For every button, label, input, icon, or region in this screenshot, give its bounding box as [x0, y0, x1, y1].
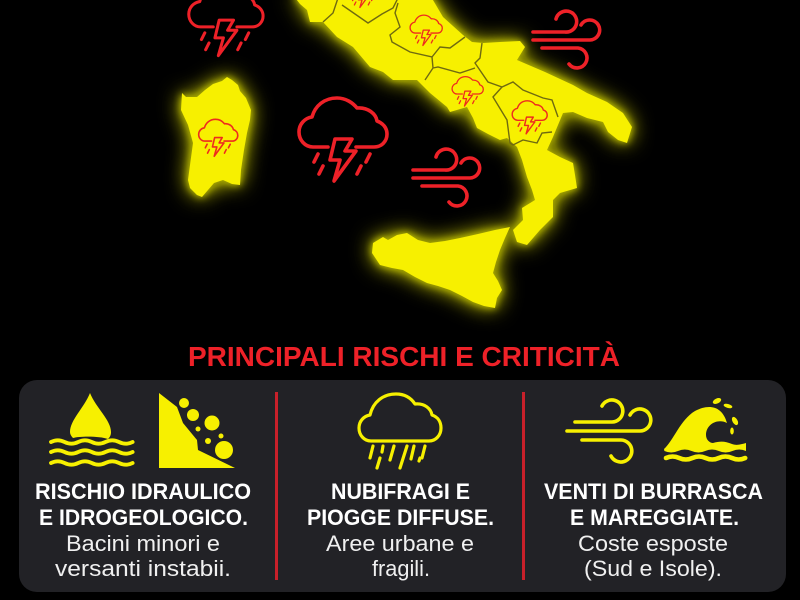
text: cloudbursts: Aree urbane e: [326, 531, 474, 556]
text: gale winds and storm surges: E MAREGGIATE.: [570, 505, 739, 530]
landmass: islands and mainland with glow: [181, 0, 632, 308]
text: hydraulic risk: E IDROGEOLOGICO.: [39, 505, 248, 530]
text: cloudbursts: fragili.: [372, 556, 430, 581]
text: hydraulic risk: versanti instabii.: [55, 556, 231, 581]
icon: storm cloud top of map: [347, 0, 379, 7]
map of southern Italy: [181, 0, 632, 308]
icon: wind Tyrrhenian: [413, 149, 480, 206]
panel: risks: [19, 380, 786, 592]
icon: landslide: [159, 393, 235, 468]
text: hydraulic risk: [35, 479, 251, 581]
heading: PRINCIPALI RISCHI E CRITICITÀ: [188, 341, 620, 372]
text: gale winds and storm surges: VENTI DI BURRASCA: [544, 479, 763, 504]
text: cloudbursts: NUBIFRAGI E: [331, 479, 470, 504]
landmass: mainland Italy: [293, 0, 632, 245]
icon: rain cloud: [359, 394, 441, 468]
icon: storm cloud top left: [189, 0, 263, 56]
text: gale winds and storm surges: (Sud e Isole).: [584, 556, 722, 581]
icon: storm cloud Abruzzo: [410, 15, 442, 45]
panel background: [19, 380, 786, 592]
regional borders: [323, 0, 558, 145]
text: gale winds and storm surges: [544, 479, 763, 581]
icon: storm cloud Basilicata: [512, 101, 547, 134]
landmass: Sardinia: [181, 77, 251, 197]
icon: wind Adriatic: [533, 11, 600, 68]
icon: storm cloud on Sardinia: [199, 119, 238, 156]
text: cloudbursts: [307, 479, 494, 581]
icon: storm cloud Campania: [452, 77, 483, 106]
column divider right: [522, 392, 525, 580]
icon: storm cloud centre sea: [299, 98, 387, 181]
icon: sea wave: [664, 397, 746, 460]
landmass: Sicily: [372, 227, 510, 308]
icon: water drop over waves: [51, 393, 133, 465]
text: gale winds and storm surges: Coste esposte: [578, 531, 728, 556]
column divider left: [275, 392, 278, 580]
icon: wind: [567, 400, 651, 462]
text: hydraulic risk: RISCHIO IDRAULICO: [35, 479, 251, 504]
text: hydraulic risk: Bacini minori e: [66, 531, 220, 556]
text: cloudbursts: PIOGGE DIFFUSE.: [307, 505, 494, 530]
